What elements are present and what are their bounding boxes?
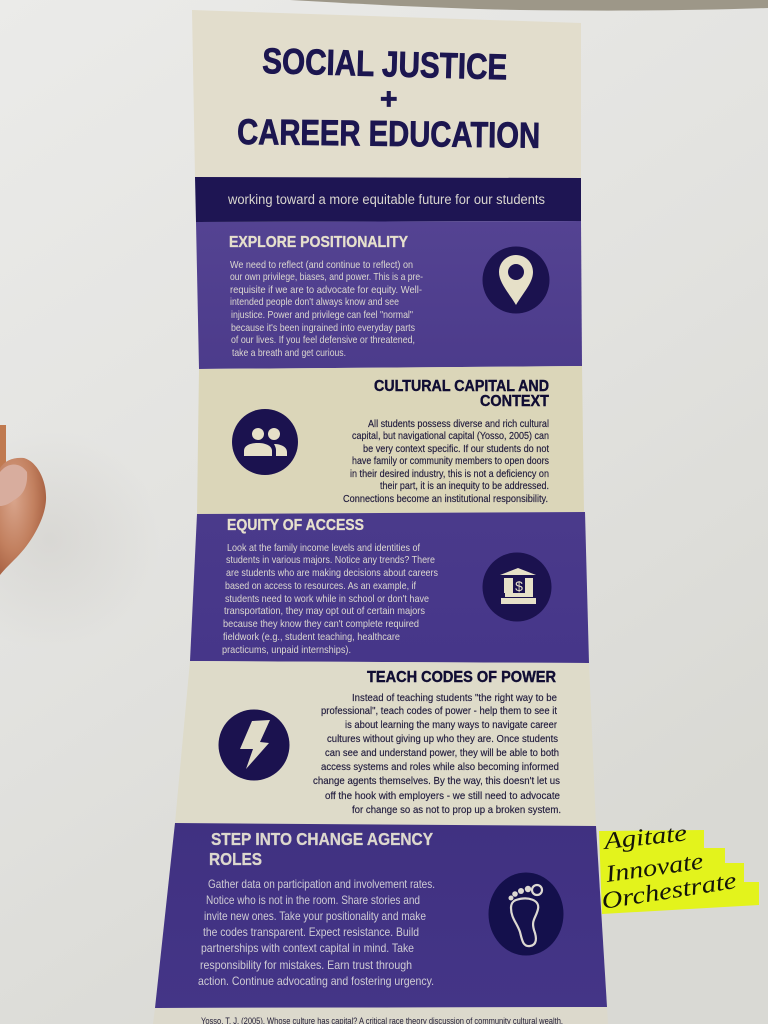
icon: map pin — [482, 246, 550, 314]
heading: main title: + — [380, 83, 398, 116]
panel: citation — [153, 1007, 608, 1024]
text block: change agency: Gather data on participation and involvement rates. — [208, 877, 435, 891]
panel: equity of access — [190, 512, 589, 663]
handwritten words: Innovate — [603, 848, 705, 888]
text block: change agency — [198, 877, 435, 988]
text block: explore positionality: our own privilege, biases, and power. This is a pre- — [230, 271, 423, 283]
icon: lightning bolt — [218, 710, 290, 780]
panel: explore positionality — [196, 221, 582, 369]
text block: teach codes of power: professional", teach codes of power - help them to see it — [321, 705, 557, 717]
text block: cultural capital: capital, but navigational capital (Yosso, 2005) can — [352, 430, 549, 442]
text block: teach codes of power: for change so as not to prop up a broken system. — [352, 804, 561, 816]
text block: cultural capital: All students possess diverse and rich cultural — [368, 418, 549, 430]
text block: equity of access: transportation, they may opt out of certain majors — [224, 605, 425, 617]
subtitle band: working toward a more equitable future for our students — [227, 192, 545, 207]
text block: cultural capital: Connections become an institutional responsibility. — [343, 493, 548, 505]
text block: equity of access: Look at the family income levels and identities of — [227, 542, 420, 554]
heading: step into change agency roles: ROLES — [209, 849, 262, 869]
heading: main title — [237, 40, 540, 156]
text block: change agency: the codes transparent. Expect resistance. Build — [203, 925, 419, 939]
text block: change agency: invite new ones. Take your positionality and make — [204, 909, 426, 923]
heading: main title: CAREER EDUCATION — [237, 111, 540, 156]
handwritten words — [600, 820, 739, 915]
text block: cultural capital — [343, 418, 549, 505]
text block: equity of access: because they know they can't complete required — [223, 618, 419, 630]
text block: cultural capital: in their desired industry, this is not a deficiency on — [350, 468, 549, 480]
text block: teach codes of power: access systems and roles while also becoming informed — [321, 761, 559, 773]
icon: footprint — [488, 872, 564, 956]
text block: explore positionality: injustice. Power and privilege can feel "normal" — [231, 309, 413, 321]
text block: explore positionality — [230, 259, 423, 359]
text block: cultural capital: be very context specific. If our students do not — [363, 443, 549, 455]
handwritten words: Agitate — [601, 820, 689, 855]
text block: explore positionality: of our lives. If you feel defensive or threatened, — [231, 334, 415, 346]
heading: cultural capital and context — [374, 378, 549, 410]
heading: explore positionality: EXPLORE POSITIONALITY — [229, 234, 409, 251]
text block: equity of access: students need to work while in school or don't have — [225, 593, 429, 605]
text block: teach codes of power: is about learning the many ways to navigate career — [345, 719, 557, 731]
text block: teach codes of power: Instead of teaching students "the right way to be — [352, 692, 557, 704]
heading: cultural capital and context: CONTEXT — [480, 393, 549, 410]
subtitle band — [195, 177, 581, 222]
text block: teach codes of power: change agents themselves. By the way, this doesn't let us — [313, 775, 560, 787]
text block: equity of access — [222, 542, 438, 656]
panel: step into change agency roles — [155, 823, 607, 1008]
text block: explore positionality: because it's been ingrained into everyday parts — [231, 322, 415, 334]
text block: explore positionality: take a breath and get curious. — [232, 347, 346, 359]
panel: teach codes of power — [175, 661, 596, 826]
text block: equity of access: students in various majors. Notice any trends? There — [226, 554, 435, 566]
text block: equity of access: practicums, unpaid internships). — [222, 644, 351, 656]
text block: teach codes of power: cultures without giving up who they are. Once students — [327, 733, 558, 745]
panel: cultural capital and context — [197, 366, 584, 514]
text block: change agency: responsibility for mistakes. Earn trust through — [200, 958, 412, 972]
text block: teach codes of power: can see and understand power, they will be able to both — [325, 747, 559, 759]
thumb holding the paper — [0, 425, 46, 575]
text block: teach codes of power: off the hook with employers - we still need to advocate — [325, 790, 560, 802]
text block: change agency: action. Continue advocating and fostering urgency. — [198, 974, 434, 988]
heading: cultural capital and context: CULTURAL CAPITAL AND — [374, 378, 549, 395]
text block: equity of access: based on access to resources. As an example, if — [225, 580, 416, 592]
text block: teach codes of power — [313, 692, 561, 816]
heading: equity of access: EQUITY OF ACCESS — [227, 517, 364, 534]
icon: two people — [232, 409, 298, 475]
text block: cultural capital: their part, it is an inequity to be addressed. — [380, 480, 549, 492]
handwritten words: Orchestrate — [600, 868, 739, 915]
panel: title — [192, 10, 581, 178]
text block: cultural capital: have family or community members to open doors — [352, 455, 549, 467]
icon: bank with dollar sign — [482, 552, 552, 622]
sticky note: yellow highlighter note — [599, 820, 759, 915]
text block: change agency: partnerships with context capital in mind. Take — [201, 941, 414, 955]
text block: explore positionality: requisite if we are to advocate for equity. Well- — [230, 284, 422, 296]
dark background at top edge of photo — [290, 0, 768, 11]
icon: bank with dollar sign: $ — [515, 578, 523, 594]
text block: equity of access: are students who are making decisions about careers — [226, 567, 438, 579]
heading: teach codes of power: TEACH CODES OF POWER — [367, 669, 556, 686]
heading: main title: SOCIAL JUSTICE — [262, 40, 508, 87]
text block: explore positionality: We need to reflect (and continue to reflect) on — [230, 259, 413, 271]
text block: change agency: Notice who is not in the room. Share stories and — [206, 893, 420, 907]
text block: explore positionality: intended people don't always know and see — [230, 296, 399, 308]
heading: step into change agency roles: STEP INTO CHANGE AGENCY — [211, 829, 433, 849]
heading: step into change agency roles — [209, 829, 433, 869]
text block: equity of access: fieldwork (e.g., student teaching, healthcare — [223, 631, 400, 643]
